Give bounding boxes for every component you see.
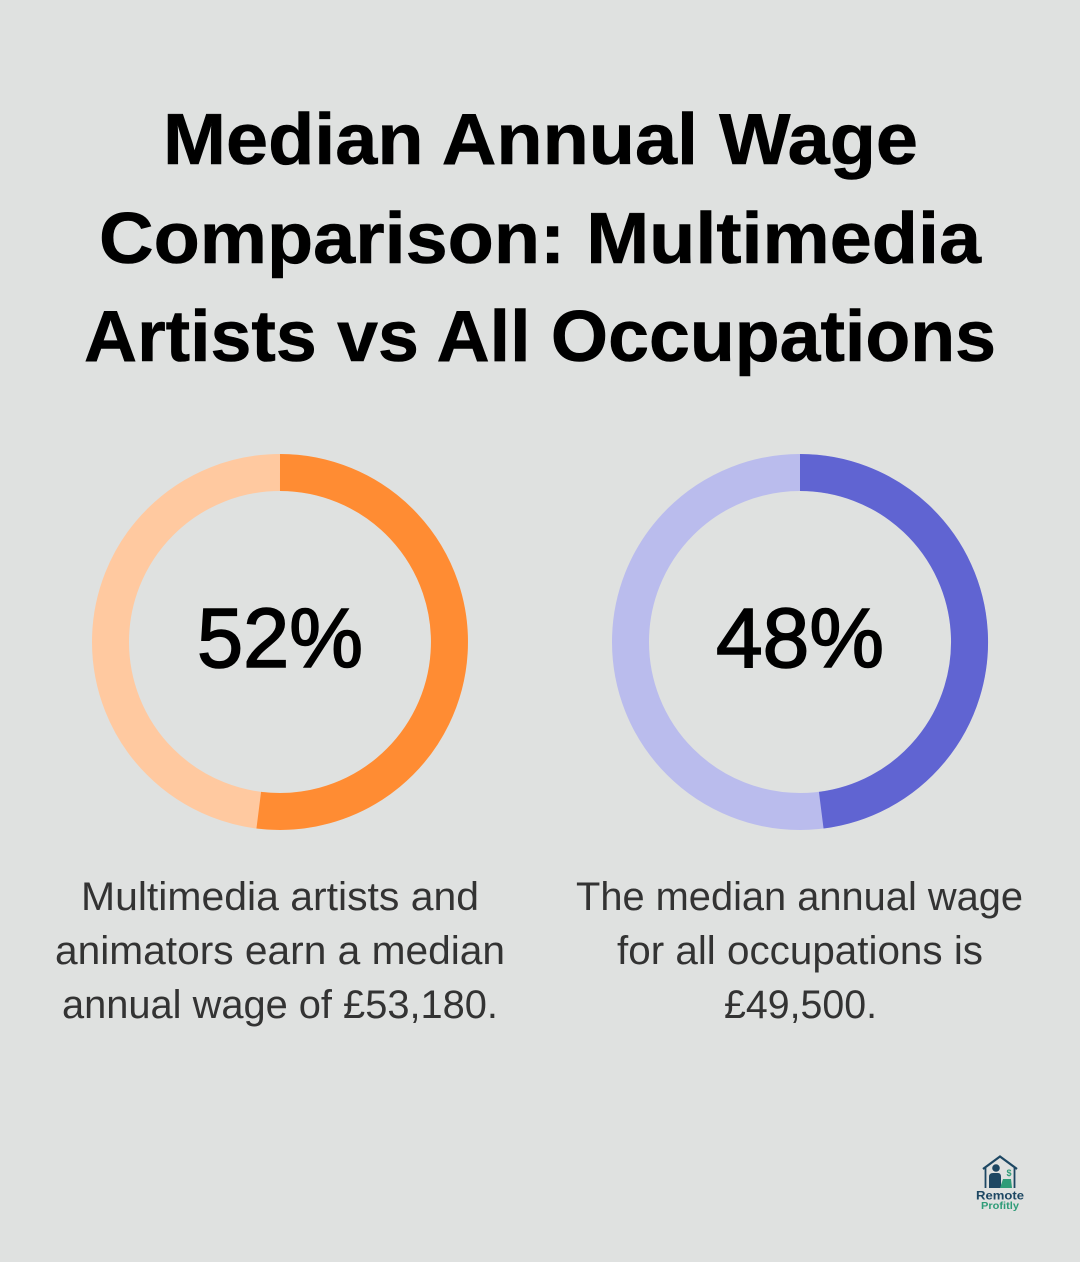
donut chart: 48% purple — [630, 472, 970, 812]
logo wordmark: Remote — [976, 1188, 1024, 1202]
panel: multimedia artists — [55, 472, 505, 1027]
value: 52%: 52% — [197, 591, 363, 685]
description: all occupations wage: The median annual wage — [576, 875, 1023, 919]
description: multimedia artists wage — [55, 875, 505, 1027]
title: Artists vs All Occupations — [84, 297, 996, 377]
panel: all occupations — [576, 472, 1023, 1027]
logo: Remote Profitly — [976, 1156, 1024, 1212]
description: multimedia artists wage: annual wage of £53,180. — [62, 983, 498, 1027]
icon: house with person and laptop: $ — [1006, 1168, 1012, 1178]
description: multimedia artists wage: animators earn a median — [55, 929, 505, 973]
logo: Remote Profitly: Profitly — [981, 1201, 1019, 1212]
title — [84, 100, 996, 377]
description: all occupations wage: for all occupations is — [617, 929, 983, 973]
title: Median Annual Wage — [163, 100, 918, 180]
description: all occupations wage — [576, 875, 1023, 1027]
value: 48%: 48% — [716, 591, 884, 685]
donut chart: 52% orange — [110, 472, 450, 812]
description: all occupations wage: £49,500. — [724, 983, 877, 1027]
title: Comparison: Multimedia — [99, 199, 982, 279]
description: multimedia artists wage: Multimedia artists and — [81, 875, 479, 919]
